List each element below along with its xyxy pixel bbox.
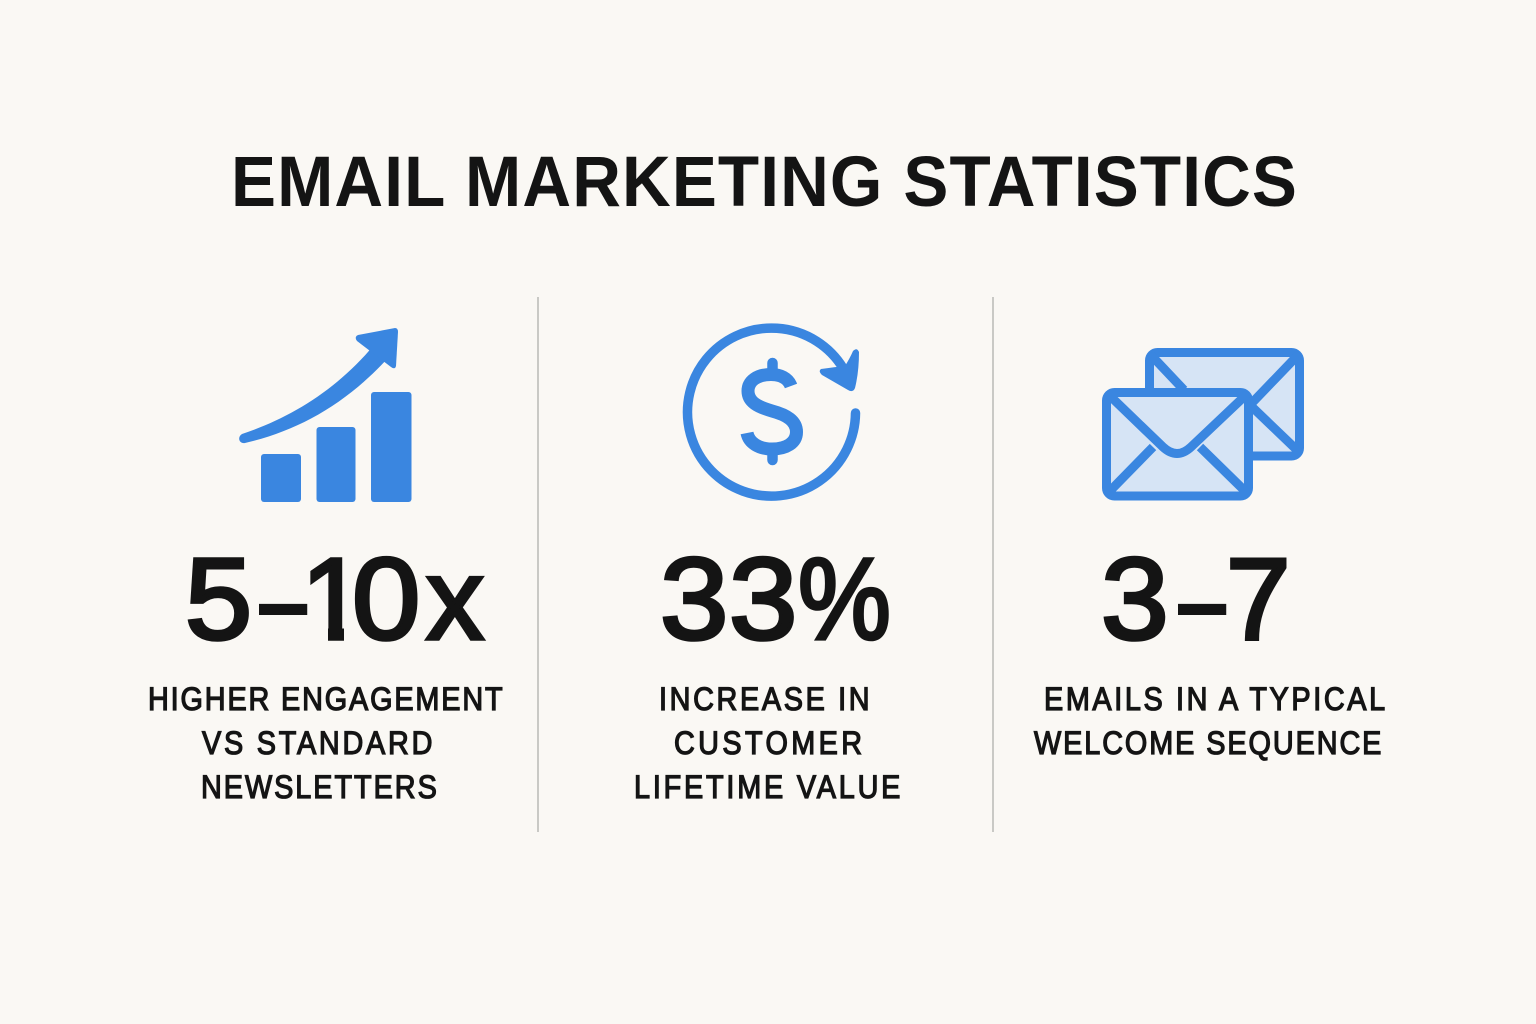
statistic: 3–7: – — [1181, 561, 1224, 646]
icon: rising bar chart with arrow — [239, 328, 412, 502]
description: customer lifetime value: CUSTOMER — [674, 726, 862, 761]
description: customer lifetime value — [634, 682, 900, 805]
statistic: 33%: 3 — [660, 535, 728, 664]
panel: lifetime value statistic — [634, 328, 900, 805]
description: welcome sequence — [1034, 682, 1385, 761]
description: higher engagement: VS STANDARD — [202, 726, 432, 761]
description: welcome sequence: EMAILS IN A TYPICAL — [1044, 682, 1385, 717]
statistic: 5–10x: 5 — [185, 535, 252, 664]
panel: engagement statistic — [148, 328, 503, 805]
statistic: 33% — [660, 535, 891, 664]
statistic: 33%: % — [798, 535, 891, 664]
icon: two overlapping envelopes — [1106, 352, 1300, 496]
title: EMAIL MARKETING STATISTICS — [231, 141, 1297, 221]
statistic: 5–10x: x — [426, 534, 484, 664]
statistic: 3–7: 3 — [1101, 535, 1169, 664]
description: welcome sequence: WELCOME SEQUENCE — [1034, 726, 1381, 761]
description: customer lifetime value: LIFETIME VALUE — [634, 770, 900, 805]
statistic: 3–7: 7 — [1226, 534, 1291, 664]
panel: welcome sequence statistic — [1034, 352, 1385, 761]
statistic: 33%: 3 — [729, 535, 797, 664]
infographic canvas — [150, 156, 1385, 832]
icon: dollar sign in circular arrow — [688, 328, 859, 496]
description: customer lifetime value: INCREASE IN — [659, 682, 870, 717]
statistic: 5–10x: – — [262, 561, 305, 646]
statistic: 5–10x: 1 — [301, 534, 366, 664]
statistic: 3–7 — [1101, 534, 1291, 664]
description: higher engagement — [148, 682, 503, 805]
description: higher engagement: HIGHER ENGAGEMENT — [148, 682, 503, 717]
statistic: 5–10x: 0 — [352, 535, 420, 664]
statistic: 5–10x — [188, 556, 486, 642]
description: higher engagement: NEWSLETTERS — [201, 770, 437, 805]
